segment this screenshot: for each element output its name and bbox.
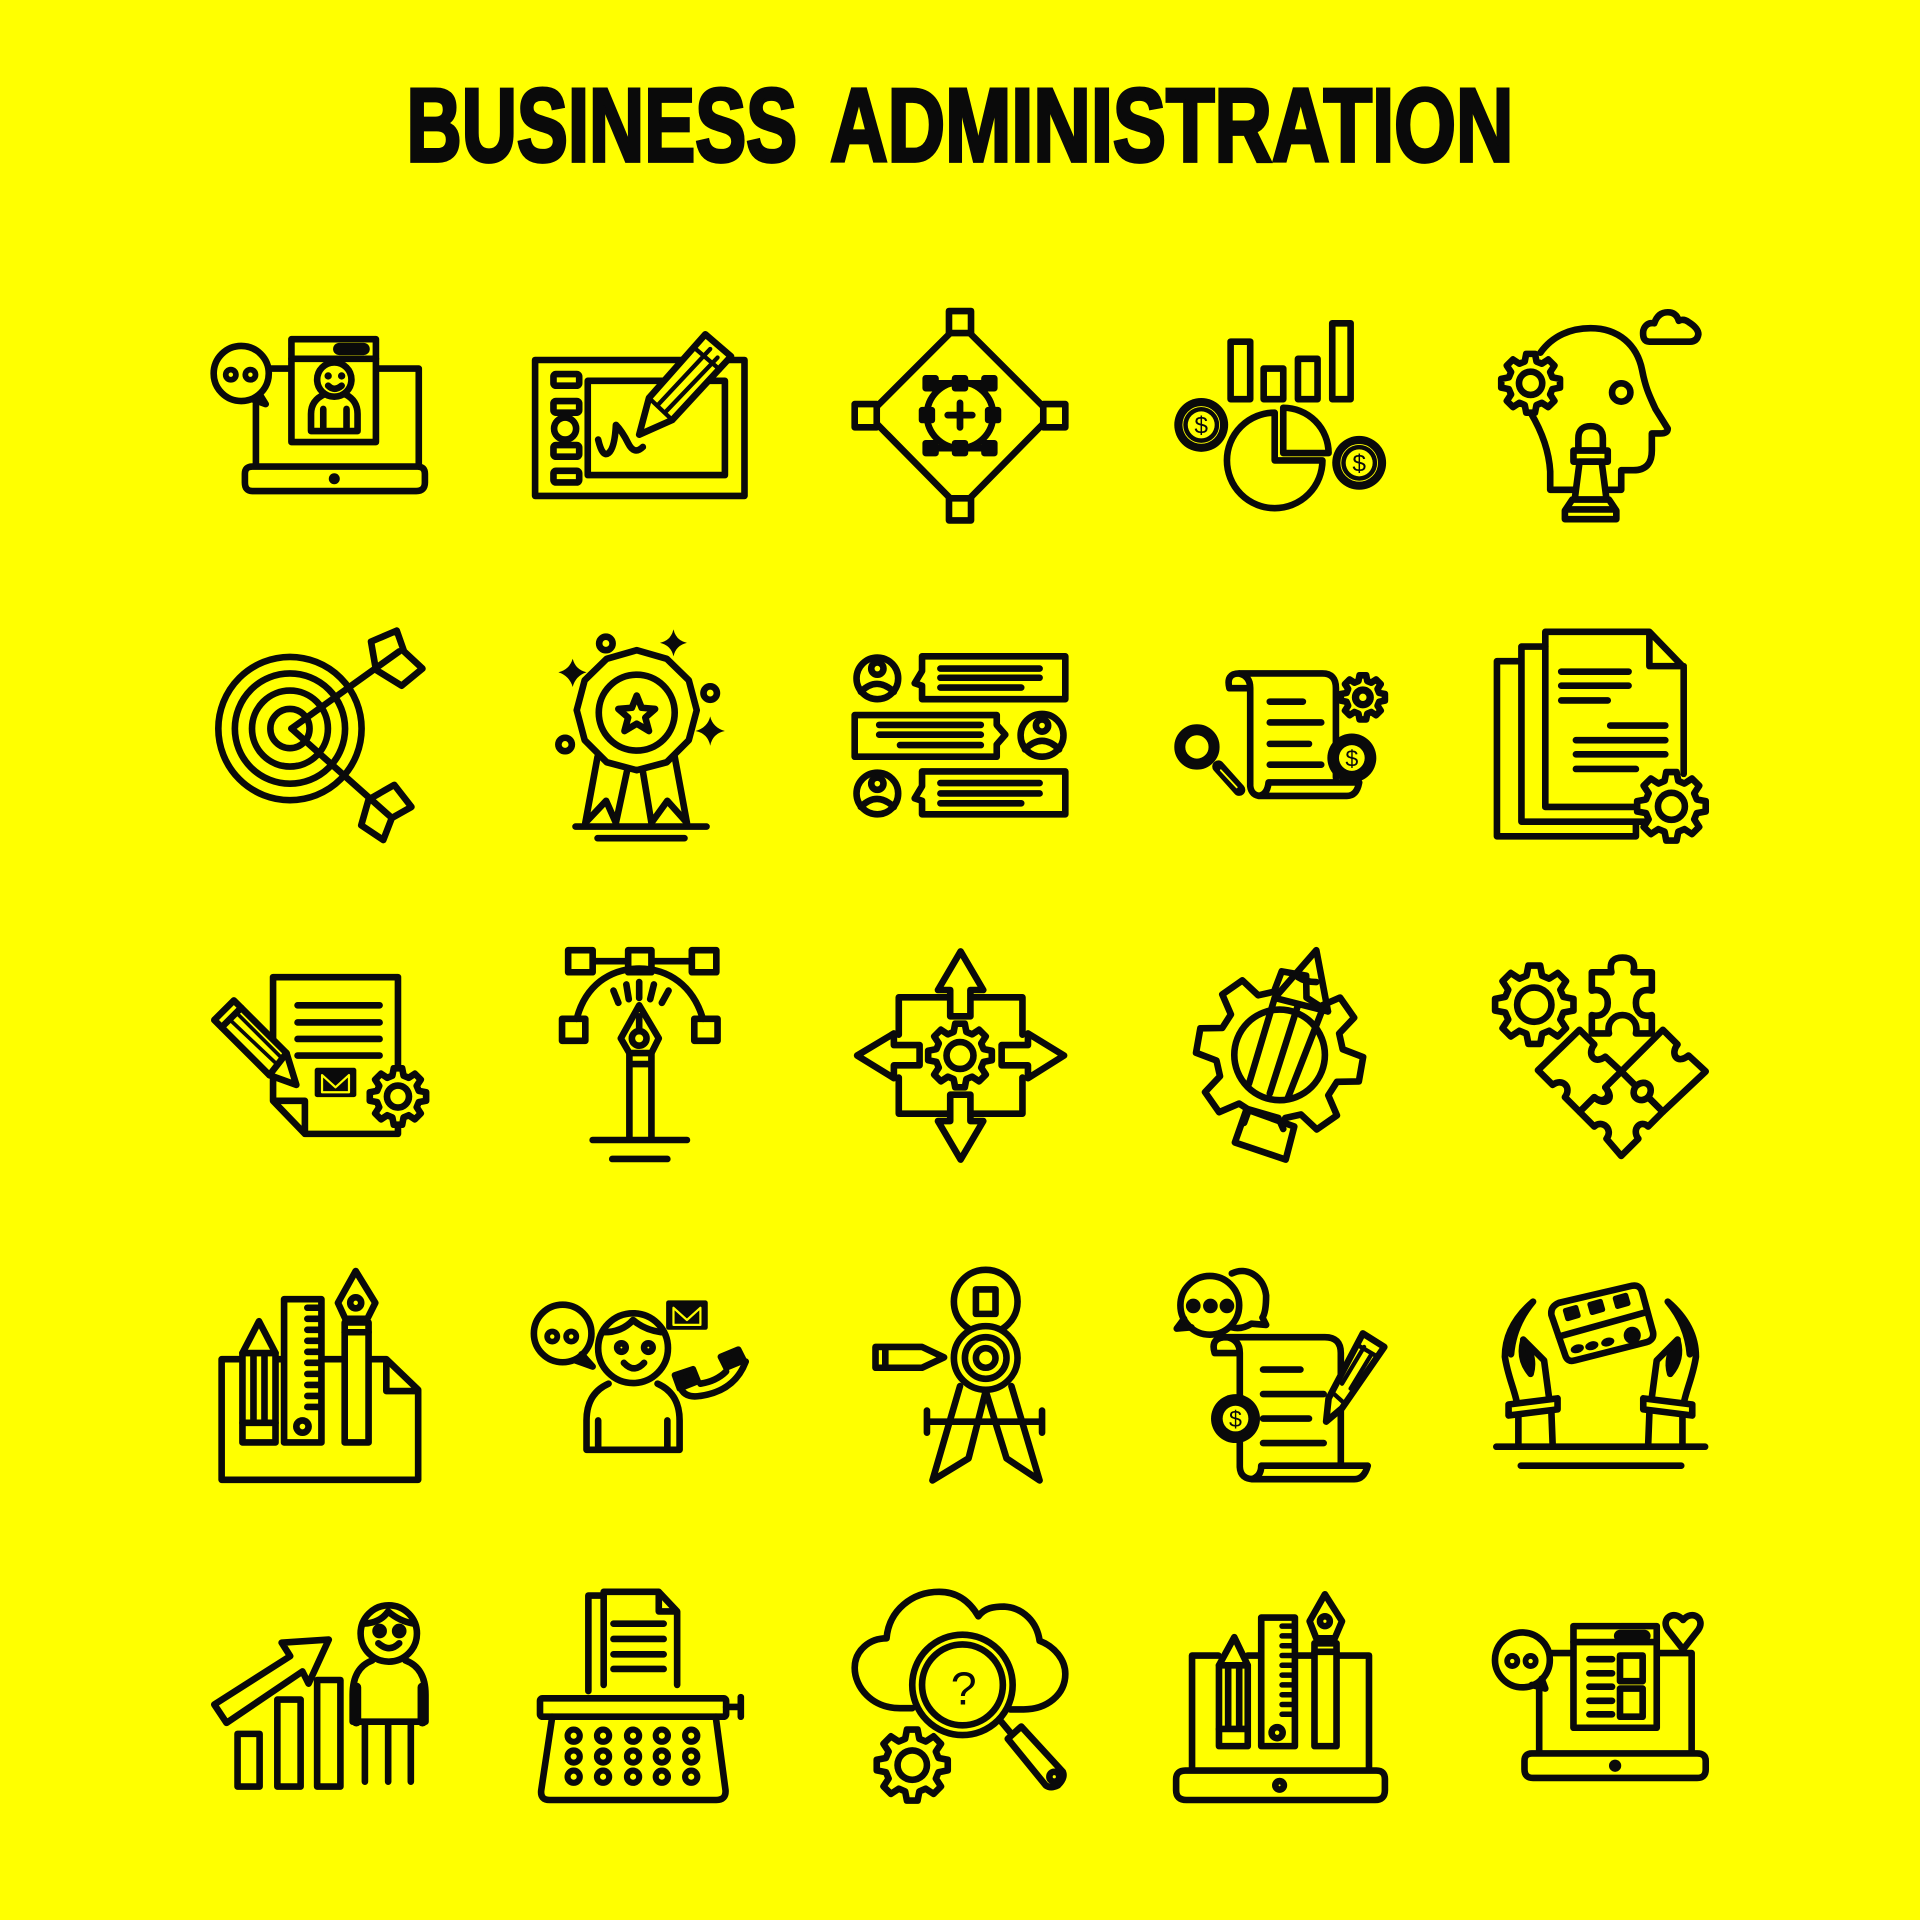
heart: [1666, 1615, 1700, 1649]
cloud: [1643, 312, 1698, 342]
coin: [1211, 1394, 1260, 1443]
envelope: [315, 1068, 356, 1097]
pen: [345, 1322, 369, 1442]
icon: gear with pencil: [1184, 950, 1375, 1160]
title: ADMINISTRATION: [830, 68, 1513, 184]
icon: laptop with stationery: [1176, 1594, 1385, 1800]
speech bubble: [534, 1305, 591, 1362]
icon: hands holding credit card: [1496, 1286, 1705, 1466]
magnifier: [1180, 730, 1239, 790]
icon: laptop with web window, bubble and heart: [1495, 1615, 1706, 1778]
icon: gear and puzzle pieces: [1495, 958, 1706, 1156]
pencil: [1275, 950, 1328, 1011]
pencil: [876, 1347, 944, 1368]
left hand: [1505, 1302, 1558, 1445]
bars: [238, 1680, 340, 1787]
bottom puzzle piece: [1580, 1071, 1663, 1156]
pie chart: [1227, 413, 1322, 508]
arrow: [214, 1640, 329, 1723]
body: [587, 1384, 680, 1450]
head outline: [1531, 328, 1668, 490]
web window: [1573, 1626, 1657, 1728]
keys: [568, 1730, 697, 1783]
pencil: [1219, 1637, 1248, 1746]
right puzzle piece: [1621, 1030, 1706, 1112]
scroll: [1214, 1337, 1368, 1479]
icon: drawing tablet with pencil: [535, 334, 744, 496]
pen body: [629, 1053, 651, 1139]
gear: [1501, 354, 1560, 413]
head: [598, 1313, 668, 1383]
icon: gear with four arrows: [857, 951, 1064, 1160]
gear: [877, 1730, 948, 1801]
icon: typewriter: [540, 1592, 741, 1800]
pen: [1314, 1643, 1337, 1746]
pencil: [1326, 1333, 1384, 1422]
right hand: [1643, 1302, 1696, 1445]
top puzzle piece: [1592, 958, 1652, 1033]
icon: cloud search with gear: ?: [951, 1662, 977, 1714]
tick marks: [613, 982, 669, 1003]
laptop: [1524, 1653, 1706, 1778]
ruler: [284, 1299, 321, 1442]
icon: target with arrows: [218, 631, 422, 840]
rosette: [577, 650, 697, 770]
gear: [1341, 675, 1385, 719]
icon: chat conversation: [855, 656, 1065, 814]
message bubbles: [915, 656, 1065, 699]
sparkles and dots: [599, 637, 613, 650]
signature squiggle: [598, 425, 643, 454]
chat bubbles: [1232, 1271, 1266, 1328]
left puzzle piece: [1538, 1030, 1621, 1112]
icon: head with gear, pawn and cloud: [1501, 312, 1698, 519]
person: [311, 394, 358, 431]
icon: compass with pencil: [876, 1270, 1042, 1480]
laptop: [1176, 1656, 1385, 1800]
icon: charts and coins: [1174, 323, 1386, 508]
icon: design node diamond: [855, 311, 1065, 520]
credit card: [1551, 1286, 1653, 1361]
coin right: [1332, 436, 1386, 490]
pencil: [242, 1321, 276, 1442]
speech bubble: [214, 346, 269, 401]
telephone: [675, 1349, 746, 1396]
icon: folder with stationery: [222, 1271, 418, 1480]
base lines: [1496, 1447, 1705, 1466]
center rings: [954, 1326, 1018, 1390]
icon grid: [214, 311, 1706, 1801]
title: [407, 68, 1513, 184]
compass legs: [932, 1386, 1040, 1480]
icon: cloud search with gear: [855, 1592, 1065, 1801]
base lines: [576, 827, 707, 838]
coin left: [1174, 398, 1228, 452]
envelope: [666, 1300, 708, 1330]
icon: award badge: [558, 629, 725, 838]
icon: person with contact options: [534, 1300, 746, 1450]
lower arrow: [291, 729, 411, 840]
body: [541, 1717, 726, 1800]
paper: [588, 1592, 677, 1691]
ruler: [1261, 1618, 1295, 1746]
center circle with plus: [927, 382, 993, 448]
selection handles: [928, 383, 992, 448]
coin: $: [1345, 746, 1358, 772]
ribbons: [585, 757, 687, 823]
icon: scroll with chat, coin and pencil: [1177, 1271, 1384, 1479]
pawn: [1578, 426, 1603, 451]
star: [618, 696, 655, 731]
coin right: $: [1352, 450, 1366, 477]
nib: [621, 1005, 659, 1053]
person: [353, 1605, 426, 1782]
icon: contract with pencil, envelope and gear: [214, 977, 426, 1134]
message lines: [879, 669, 1040, 803]
gear: [370, 1068, 426, 1125]
coin: [1327, 733, 1376, 782]
upper arrow: [291, 631, 422, 729]
coin left: $: [1194, 412, 1208, 439]
title: BUSINESS: [407, 68, 797, 184]
arrows: [938, 951, 983, 1016]
icon: document stack with gear: [1497, 632, 1706, 841]
profile window: [291, 339, 376, 442]
bar chart: [1231, 323, 1351, 399]
coin: $: [1229, 1406, 1242, 1432]
speech bubble: [1495, 1632, 1550, 1687]
icon: pen tool bezier: [562, 950, 718, 1159]
base lines: [593, 1140, 687, 1159]
cross bar: [927, 1411, 1042, 1433]
icon: laptop with profile window and speech bubble: [214, 339, 425, 491]
avatars: [857, 658, 1063, 814]
icon: scroll with magnifier, gear and coin: [1180, 673, 1385, 796]
pencil: [214, 1000, 296, 1085]
pencil: [639, 334, 731, 435]
tablet buttons: [553, 374, 579, 386]
roller: [540, 1698, 726, 1717]
gear: [928, 1024, 992, 1087]
icon: growth chart with person: [214, 1605, 426, 1787]
magnifier: [912, 1635, 1013, 1735]
cloud: [855, 1592, 1065, 1709]
laptop body: [245, 369, 425, 491]
